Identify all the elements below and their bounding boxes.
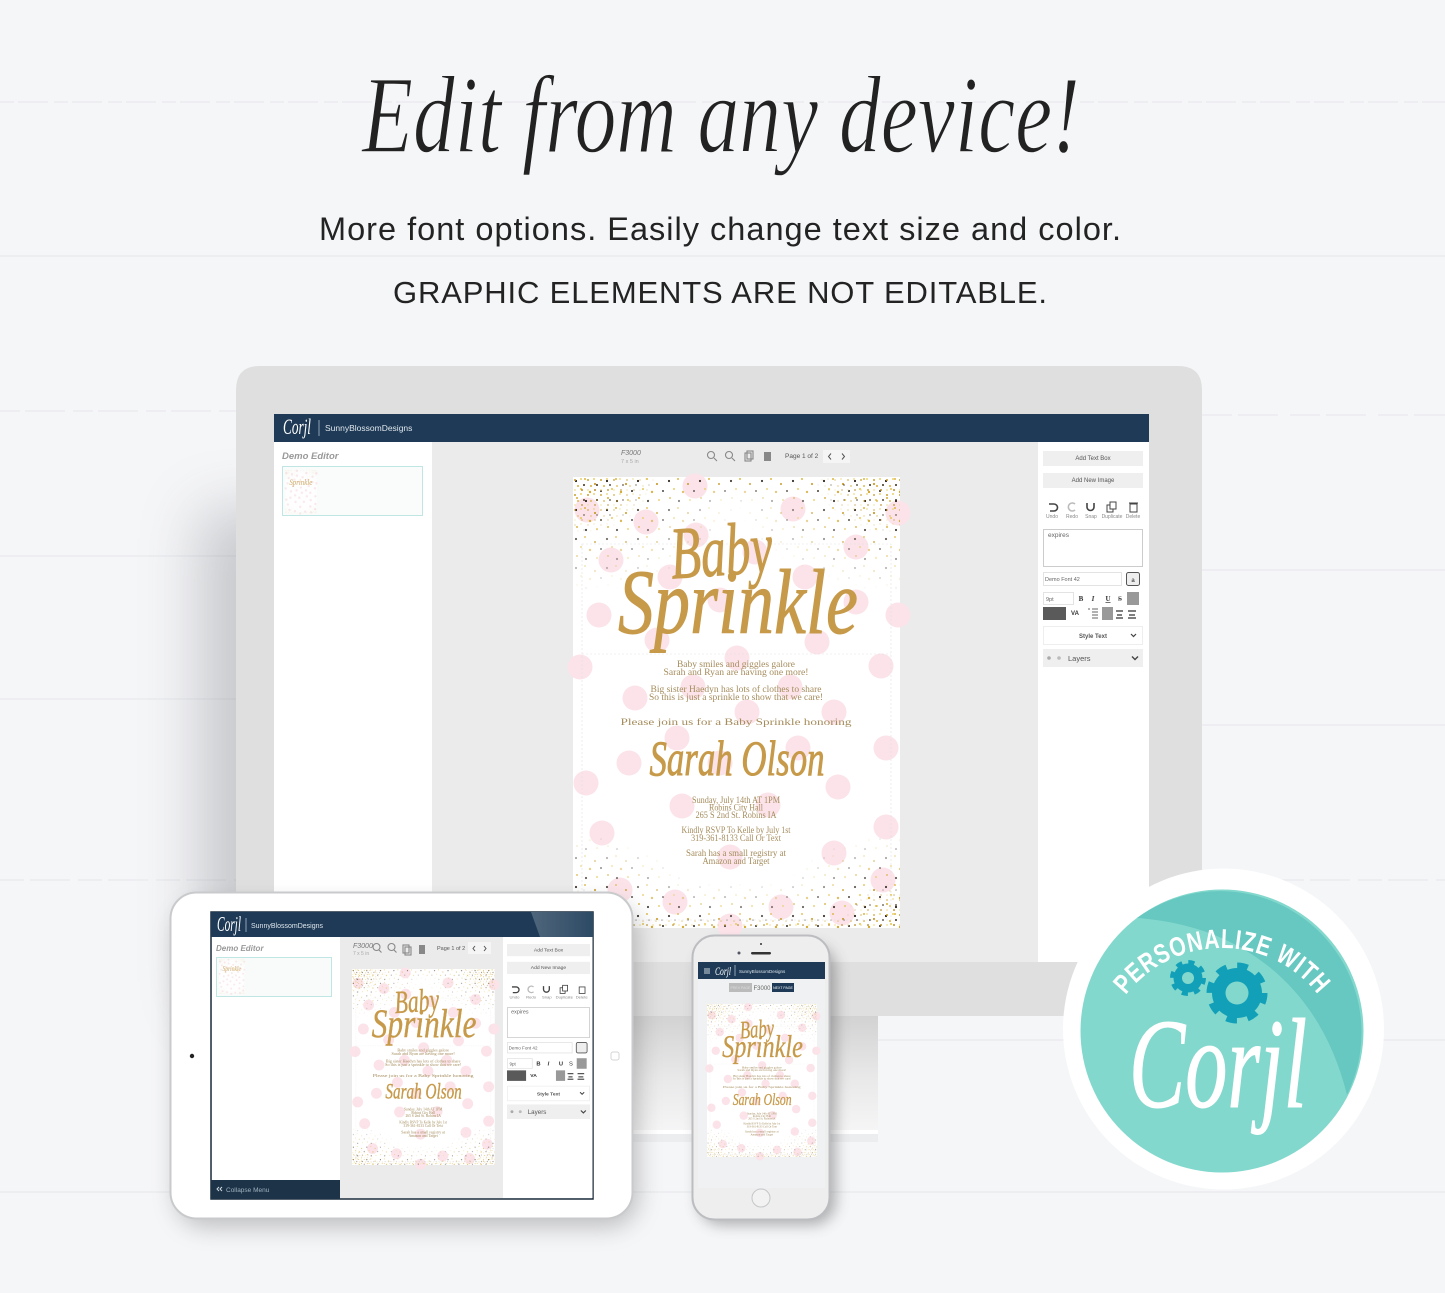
tablet tools panel: Redo: [526, 994, 537, 999]
monitor stand: [633, 1016, 878, 1142]
invitation: phone: 319-361-8133 Call Or Text: [747, 1124, 777, 1128]
previous page button: PREV PAGE: [731, 986, 751, 990]
tablet pages panel: Demo Editor: [216, 944, 264, 953]
invitation: tablet canvas: Sarah has a small registry at: [401, 1131, 446, 1135]
invitation message: Big sister Haedyn has lots of clothes to share: [650, 684, 822, 694]
invitation: tablet canvas: 265 S 2nd St. Robins IA: [405, 1114, 441, 1118]
right tools panel: I: [1091, 595, 1095, 603]
tablet tools panel: S: [569, 1062, 573, 1067]
tablet tools panel: Undo: [510, 994, 520, 999]
tablet tools panel: U: [559, 1062, 563, 1067]
collapse menu bar: [211, 1180, 340, 1199]
left pages panel: [274, 442, 432, 962]
right tools panel: Style Text: [1079, 634, 1107, 640]
invitation: tablet canvas: Amazon and Target: [409, 1134, 439, 1138]
tablet navigation bar: [211, 912, 593, 937]
tablet canvas toolbar: Page 1 of 2: [437, 946, 465, 952]
tablet home button: [611, 1052, 619, 1060]
invitation message: Sarah and Ryan are having one more!: [664, 667, 808, 677]
tablet tools panel: Delete: [576, 994, 588, 999]
invitation: tablet canvas: Please join us for a Baby Sprinkle honoring: [373, 1074, 474, 1078]
invitation: tablet canvas: Sunday, July 14th AT 1PM: [404, 1108, 443, 1113]
phone home button: [752, 1189, 770, 1207]
tablet camera: [190, 1054, 194, 1058]
previous page button: [729, 983, 752, 992]
invitation: phone: Sunday, July 14th AT 1PM: [747, 1112, 777, 1117]
phone camera and speaker: [738, 943, 771, 954]
invitation details: Sarah has a small registry at: [686, 848, 786, 858]
page thumbnail: [284, 470, 318, 515]
invitation: tablet canvas: Baby smiles and giggles galore: [397, 1049, 449, 1053]
invitation: phone: So this is just a sprinkle to show that we care!: [733, 1077, 791, 1081]
icon: large gear: [1210, 966, 1264, 1020]
invitation details: Amazon and Target: [702, 856, 770, 866]
right tools panel: Duplicate: [1102, 514, 1123, 520]
right tools panel: S: [1118, 595, 1122, 603]
badge darker crescent: [1137, 891, 1362, 1095]
phone screen: [698, 962, 825, 1188]
tablet tools panel: [507, 944, 590, 1119]
invitation message: So this is just a sprinkle to show that we care!: [649, 692, 823, 702]
tablet navigation bar: Corjl: [217, 912, 241, 936]
collapse menu bar: Collapse Menu: [226, 1187, 270, 1194]
invitation: phone: Baby smiles and giggles galore: [742, 1065, 782, 1069]
tablet tools panel: expires: [511, 1010, 529, 1016]
page thumbnail: Sprinkle: [289, 477, 312, 487]
right tools panel: Undo: [1046, 514, 1058, 520]
tablet shadow: [176, 905, 638, 1227]
invitation: tablet canvas: Kindly RSVP To Kelle by July 1st: [399, 1121, 448, 1125]
right tools panel: Demo Font 42: [1045, 577, 1080, 583]
monitor bezel: [236, 366, 1202, 1016]
invitation: phone: Please join us for a Baby Sprinkle honoring: [723, 1085, 801, 1089]
invitation: phone: Robins City Hall: [753, 1114, 771, 1118]
badge curved heading: PERSONALIZE WITH: [1112, 929, 1331, 994]
invitation: tablet canvas: [350, 967, 499, 1170]
invitation: phone: Big sister Haedyn has lots of clothes to share: [733, 1074, 791, 1078]
tablet pages panel: Sprinkle: [222, 965, 241, 973]
tablet tools panel: I: [548, 1062, 550, 1067]
top navigation bar: Corjl: [283, 414, 311, 439]
editor screen: [274, 414, 1149, 962]
right tools panel: B: [1079, 595, 1084, 603]
invitation: phone: Sprinkle: [722, 1029, 803, 1064]
invitation details: 319-361-8133 Call Or Text: [691, 833, 781, 843]
phone shadow: [698, 945, 836, 1225]
right tools panel: Add Text Box: [1075, 456, 1111, 462]
phone navigation bar: [698, 962, 825, 979]
icon: small gear: [1172, 962, 1204, 994]
desktop monitor: [236, 366, 1202, 1142]
right tools panel: a: [1131, 578, 1135, 584]
badge teal disc: [1080, 890, 1364, 1172]
tablet tools panel: Snap: [542, 994, 552, 999]
right tools panel: U: [1105, 595, 1111, 603]
invitation: tablet canvas: Big sister Haedyn has lots of clothes to share: [386, 1059, 461, 1063]
honoree name: Sarah Olson: [650, 730, 824, 786]
invitation details: 265 S 2nd St. Robins IA: [696, 810, 777, 820]
invitation details: Sunday, July 14th AT 1PM: [692, 795, 780, 805]
invitation: desktop canvas: [568, 474, 910, 938]
badge logo wordmark: Corjl: [1129, 993, 1307, 1135]
invitation: phone: Baby: [739, 1015, 776, 1044]
right tools panel: Delete: [1126, 514, 1140, 520]
canvas toolbar: F3000: [621, 450, 641, 457]
tablet tools panel: 9pt: [509, 1062, 517, 1066]
subtitle: font options: More font options. Easily change text size and color.: [319, 211, 1121, 247]
phone navigation bar: Corjl: [715, 964, 731, 978]
right tools panel: Redo: [1066, 514, 1078, 520]
invitation: phone: Kindly RSVP To Kelle by July 1st: [743, 1122, 780, 1126]
invitation headline: Baby: [668, 507, 775, 596]
top navigation bar: SunnyBlossomDesigns: [325, 423, 412, 433]
tablet pages panel: [216, 944, 332, 996]
undo redo snap duplicate delete icons: [1049, 502, 1138, 512]
tablet canvas toolbar: F3000: [353, 943, 373, 950]
invitation details: Kindly RSVP To Kelle by July 1st: [682, 825, 791, 835]
right tools panel: 9pt: [1046, 597, 1054, 603]
tablet canvas toolbar: 7 x 5 in: [353, 951, 369, 957]
top navigation bar: [274, 414, 1149, 442]
invitation: phone: Sarah and Ryan are having one more!: [737, 1068, 786, 1072]
invitation message: Baby smiles and giggles galore: [677, 659, 795, 669]
tablet tools panel: Add Text Box: [534, 947, 564, 953]
tablet canvas toolbar: [353, 942, 491, 957]
next page button: NEXT PAGE: [773, 986, 794, 990]
tablet tools panel: Layers: [528, 1109, 546, 1116]
tablet tools panel: Style Text: [537, 1092, 560, 1097]
invitation: tablet canvas: So this is just a sprinkle to show that we care!: [385, 1063, 461, 1067]
invitation message: [620, 659, 852, 727]
tablet navigation bar: SunnyBlossomDesigns: [251, 923, 323, 930]
invitation: tablet canvas: Baby: [393, 981, 441, 1020]
phone navigation bar: SunnyBlossomDesigns: [739, 969, 786, 974]
invitation: phone: Sarah has a small registry at: [745, 1130, 779, 1134]
badge white ring: [1063, 868, 1384, 1190]
invitation: tablet canvas: Sarah and Ryan are having one more!: [392, 1052, 455, 1056]
title: Edit from any device!: [360, 54, 1080, 176]
tablet tools panel: B: [536, 1062, 541, 1067]
tablet tools panel: Duplicate: [556, 994, 574, 999]
right tools panel: Add New Image: [1072, 478, 1115, 484]
invitation: tablet canvas: Robins City Hall: [411, 1111, 435, 1115]
invitation: phone: Amazon and Target: [751, 1132, 773, 1136]
canvas toolbar: 7 x 5 in: [621, 459, 639, 465]
right tools panel: Snap: [1085, 514, 1097, 520]
tablet: [170, 892, 632, 1218]
invitation: tablet canvas: 319-361-8133 Call Or Text: [404, 1124, 444, 1128]
invitation: tablet canvas: Sarah Olson: [385, 1080, 462, 1103]
subtitle: graphic elements notice: GRAPHIC ELEMENTS ARE NOT EDITABLE.: [393, 275, 1047, 310]
invitation: phone: Sarah Olson: [733, 1090, 792, 1109]
right tools panel: expires: [1048, 532, 1070, 539]
invitation message: Please join us for a Baby Sprinkle honoring: [620, 717, 852, 727]
phone: [692, 936, 830, 1220]
monitor shadow: [200, 510, 500, 1010]
canvas toolbar: [621, 450, 850, 465]
invitation headline: Sprinkle: [618, 551, 858, 653]
right tools panel: [1038, 442, 1149, 962]
tablet tools panel: Add New Image: [531, 965, 566, 971]
corjl badge: [1063, 868, 1384, 1190]
invitation details: [682, 795, 791, 866]
right tools panel: VA: [1071, 611, 1080, 617]
invitation: phone: 265 S 2nd St. Robins IA: [748, 1117, 776, 1121]
next page button: [772, 983, 794, 992]
canvas toolbar: Page 1 of 2: [785, 453, 819, 460]
invitation details: Robins City Hall: [709, 802, 763, 812]
left pages panel: Demo Editor: [282, 451, 340, 462]
invitation: tablet canvas: Sprinkle: [372, 1001, 476, 1046]
invitation headline: [618, 507, 858, 653]
tablet screen: [211, 912, 593, 1199]
invitation: phone: [705, 1003, 821, 1161]
right tools panel: Layers: [1068, 654, 1091, 663]
tablet tools panel: VA: [530, 1073, 537, 1079]
tablet tools panel: Demo Font 42: [509, 1045, 538, 1050]
page name: F3000: [753, 986, 771, 992]
